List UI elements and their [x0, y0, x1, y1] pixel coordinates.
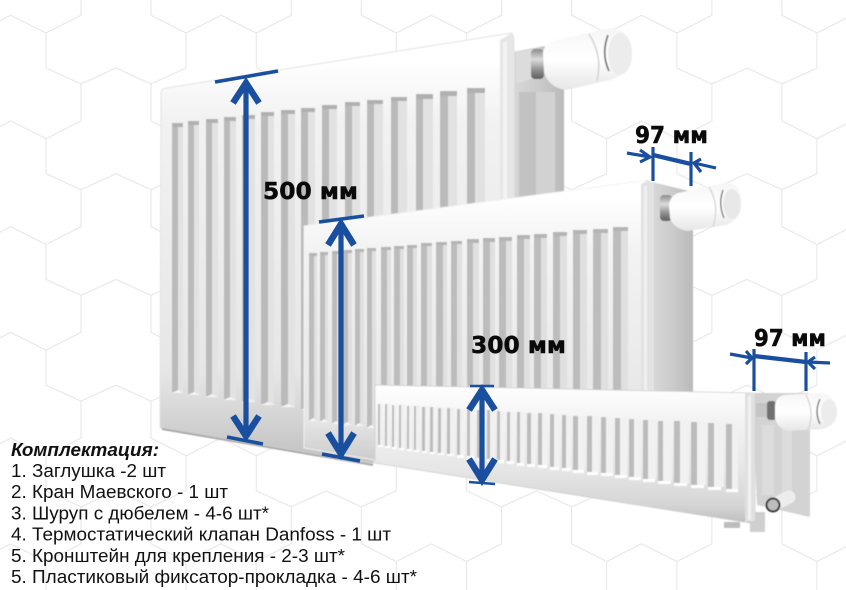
large radiator 500 mm [160, 28, 632, 465]
label: 500 mm: 500 мм [263, 179, 358, 205]
thermostatic valve top [531, 28, 632, 90]
dimension arrow: 97 mm depth, medium radiator [627, 147, 716, 186]
medium radiator [304, 180, 742, 460]
list heading: Комплектация: [11, 439, 159, 460]
label: 97 mm lower: 97 мм [754, 326, 826, 352]
thermostatic valve bottom [756, 393, 837, 431]
list item 5: 5. Кронштейн для крепления - 2-3 шт* [11, 545, 345, 566]
list item 4: 4. Термостатический клапан Danfoss - 1 шт [11, 524, 391, 544]
side fold of large radiator [500, 33, 514, 200]
fins of large radiator [172, 88, 485, 410]
dimension arrow: 300 mm height of medium radiator [319, 216, 364, 461]
rear panel of large radiator [512, 46, 564, 200]
label: 300 mm: 300 мм [471, 333, 566, 359]
list item 2: 2. Кран Маевского - 1 шт [11, 481, 228, 502]
front panel of medium radiator [304, 180, 653, 460]
label: 97 mm upper: 97 мм [635, 123, 708, 149]
side fold of medium radiator [641, 180, 653, 392]
side fold of small radiator [745, 393, 755, 522]
rear panel of medium radiator [652, 182, 693, 392]
fins of small radiator [378, 404, 738, 492]
thermostatic valve middle [660, 183, 742, 231]
bottom shadow of large radiator [162, 429, 373, 465]
front panel of small radiator [375, 385, 755, 523]
dimension arrow: 500 mm height [215, 71, 278, 444]
list item 3: 3. Шуруп с дюбелем - 4-6 шт* [11, 502, 269, 524]
list item 1: 1. Заглушка -2 шт [11, 460, 166, 481]
front panel of large radiator [160, 33, 514, 464]
dimension arrow: 97 mm depth, small radiator [730, 349, 830, 391]
list item 6: 5. Пластиковый фиксатор-прокладка - 4-6 шт* [11, 566, 417, 587]
rear panel of small radiator [752, 393, 810, 517]
bracket and lower pipe [724, 497, 789, 532]
fins of medium radiator [309, 227, 628, 428]
small radiator 300 mm [375, 385, 837, 532]
dimension arrow: small radiator height [469, 386, 495, 484]
equipment list [11, 439, 417, 587]
